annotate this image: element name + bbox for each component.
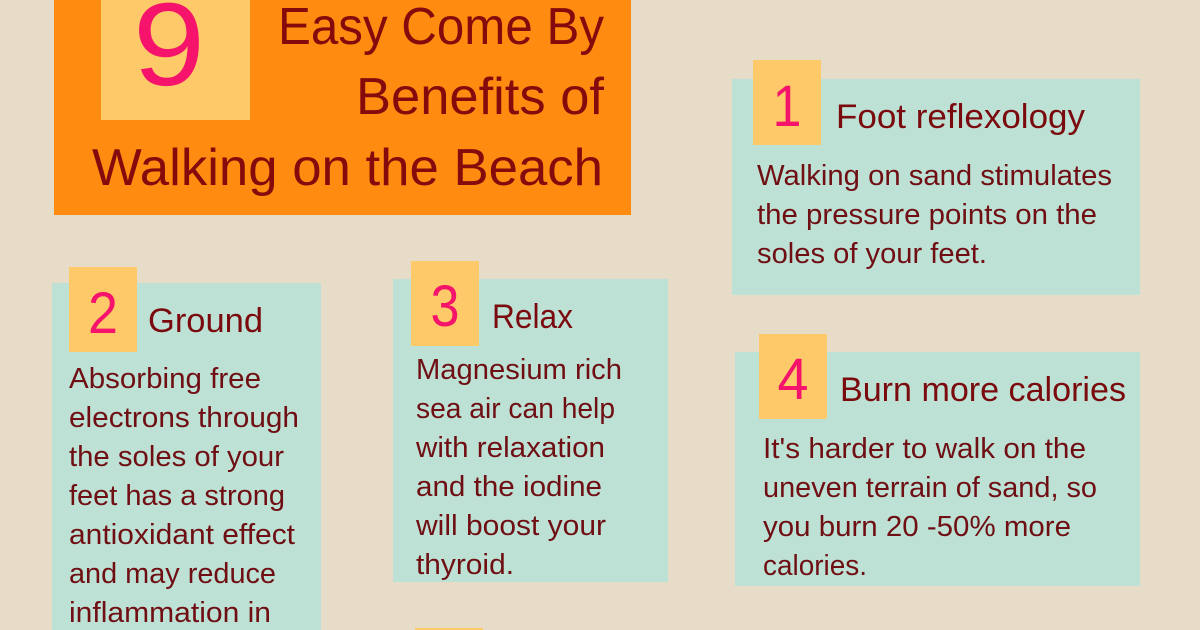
panel: ground (52, 267, 321, 630)
body text (757, 160, 1112, 270)
next badge top edge (415, 628, 483, 630)
body text (415, 354, 622, 581)
body text: and may reduce (69, 558, 276, 590)
number badge: 4 (759, 334, 827, 419)
title panel (54, 0, 631, 215)
body text: you burn 20 -50% more (763, 511, 1071, 543)
body text (763, 433, 1097, 582)
body text: uneven terrain of sand, so (763, 472, 1097, 504)
body text: soles of your feet. (757, 238, 987, 270)
body text: the pressure points on the (757, 199, 1097, 231)
panel: burn more calories (735, 334, 1140, 586)
number badge: 1 (753, 60, 821, 145)
body text: antioxidant effect (69, 519, 295, 551)
number badge: 3 (411, 261, 479, 346)
heading: Ground (148, 302, 263, 340)
body text: with relaxation (415, 432, 605, 464)
title text: Benefits of (356, 68, 605, 126)
body text: calories. (763, 550, 867, 582)
body text: Walking on sand stimulates (757, 160, 1112, 192)
body text: It's harder to walk on the (763, 433, 1086, 465)
number badge: 1: 1 (772, 74, 802, 139)
title text (92, 0, 605, 197)
number badge: 9 (101, 0, 250, 120)
number badge: 2 (69, 267, 137, 352)
body text: sea air can help (416, 393, 615, 425)
panel: foot reflexology (732, 60, 1140, 295)
panel: relax (393, 261, 668, 582)
body text: the soles of your (69, 441, 284, 473)
body text: inflammation in (69, 597, 271, 629)
body text: will boost your (415, 510, 606, 542)
heading: Relax (492, 298, 573, 336)
number badge: 3: 3 (430, 274, 460, 339)
body text: electrons through (69, 402, 299, 434)
body text: and the iodine (416, 471, 602, 503)
title text: Walking on the Beach (92, 139, 603, 197)
body text: thyroid. (416, 549, 514, 581)
body text (69, 363, 299, 629)
heading: Foot reflexology (836, 98, 1085, 136)
number badge: 2: 2 (88, 281, 118, 346)
body text: Absorbing free (69, 363, 261, 395)
body text: Magnesium rich (416, 354, 622, 386)
number badge: 4: 4 (778, 347, 808, 412)
heading: Burn more calories (840, 371, 1126, 409)
body text: feet has a strong (69, 480, 285, 512)
